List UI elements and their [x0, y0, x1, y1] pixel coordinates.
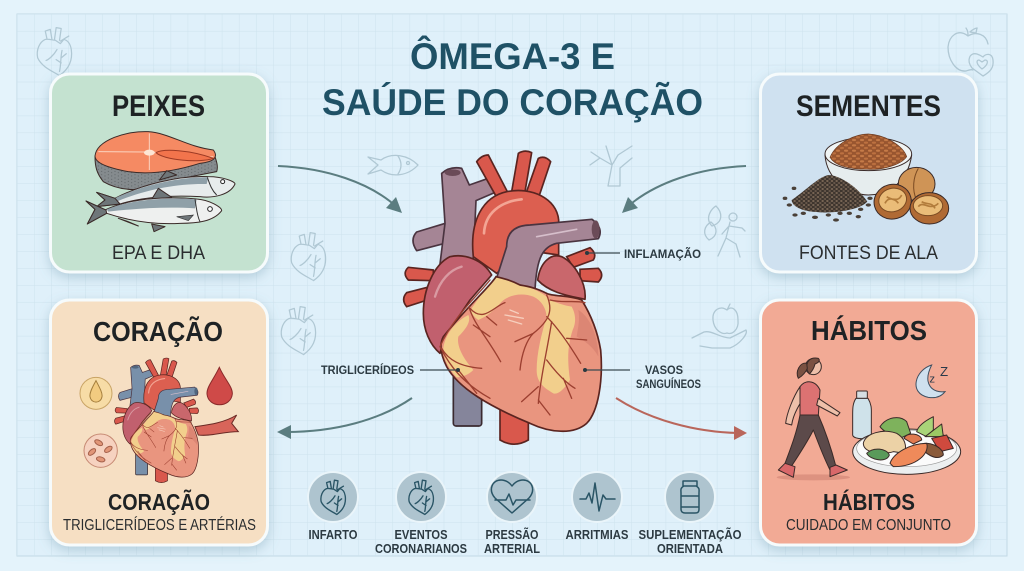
- icon: arritmias: ARRITMIAS: [566, 528, 628, 542]
- arrow: peixes to heart: [278, 166, 402, 213]
- illustration: seeds and walnuts: [783, 134, 949, 224]
- icon: eventos coronarianos: CORONARIANOS: [375, 542, 467, 556]
- icon: infarto: INFARTO: [308, 528, 358, 542]
- heading: peixes: PEIXES: [112, 90, 205, 123]
- decorative icon: hand and apple: [692, 304, 746, 348]
- icon: arritmias: [566, 472, 628, 542]
- caption: cuidado em conjunto: CUIDADO EM CONJUNTO: [786, 517, 951, 534]
- decorative icon: fish: [368, 155, 418, 175]
- panel: hábitos: [760, 300, 976, 545]
- decorative icon: heart middle left: [291, 233, 326, 281]
- icon: eventos coronarianos: [375, 472, 467, 556]
- icon: suplementação orientada: SUPLEMENTAÇÃO: [638, 527, 742, 542]
- decorative icon: tree: [590, 146, 632, 186]
- illustration: walking woman, water, plate, moon: [777, 358, 961, 480]
- subheading: hábitos: HÁBITOS: [823, 488, 915, 515]
- subheading: coração: CORAÇÃO: [108, 488, 210, 515]
- callout: triglicerídeos: [321, 364, 460, 377]
- icon: suplementação orientada: [638, 472, 742, 556]
- illustration: salmon and sardines: [86, 132, 235, 232]
- callout: inflamação: INFLAMAÇÃO: [624, 248, 701, 261]
- title: [322, 35, 703, 123]
- arrow: sementes to heart: [622, 166, 746, 213]
- panel: peixes: [50, 74, 268, 272]
- row: outcome icons: [308, 472, 742, 556]
- central heart illustration: [404, 151, 602, 444]
- caption: EPA e DHA: EPA E DHA: [112, 242, 205, 264]
- decorative icon: heart lower left: [281, 307, 316, 355]
- title: ÔMEGA-3 E: [410, 35, 615, 77]
- illustration: walking woman, water, plate, moon: z: [929, 373, 935, 385]
- title: SAÚDE DO CORAÇÃO: [322, 81, 703, 123]
- heading: sementes: SEMENTES: [796, 90, 941, 123]
- callout: inflamação: [585, 248, 701, 261]
- decorative icon: leaves and walker: [705, 206, 745, 257]
- decorative icon: apple and heart: [948, 28, 993, 76]
- arrow: heart to coração: [277, 398, 412, 439]
- icon: pressão arterial: [484, 472, 540, 556]
- icon: eventos coronarianos: EVENTOS: [394, 528, 448, 542]
- callout: vasos sanguíneos: VASOS: [645, 365, 683, 377]
- illustration: walking woman, water, plate, moon: Z: [940, 364, 948, 379]
- decorative icon: heart top left: [37, 28, 72, 76]
- arrow: heart to hábitos: [616, 398, 747, 440]
- icon: pressão arterial: PRESSÃO: [486, 527, 539, 542]
- callout: triglicerídeos: TRIGLICERÍDEOS: [321, 364, 414, 377]
- illustration: heart with oil drop, blood drop and cells: [80, 358, 238, 483]
- callout: vasos sanguíneos: [583, 365, 701, 391]
- heading: coração: CORAÇÃO: [93, 316, 223, 347]
- callout: vasos sanguíneos: SANGUÍNEOS: [636, 378, 701, 391]
- caption: triglicerídeos e artérias: TRIGLICERÍDEOS E ARTÉRIAS: [63, 517, 256, 534]
- icon: infarto: [308, 472, 358, 542]
- panel: sementes: [760, 74, 976, 272]
- caption: fontes de ALA: FONTES DE ALA: [799, 242, 938, 264]
- heading: hábitos: HÁBITOS: [811, 315, 927, 346]
- panel: coração: [50, 300, 268, 545]
- icon: pressão arterial: ARTERIAL: [484, 542, 540, 556]
- icon: suplementação orientada: ORIENTADA: [657, 542, 723, 556]
